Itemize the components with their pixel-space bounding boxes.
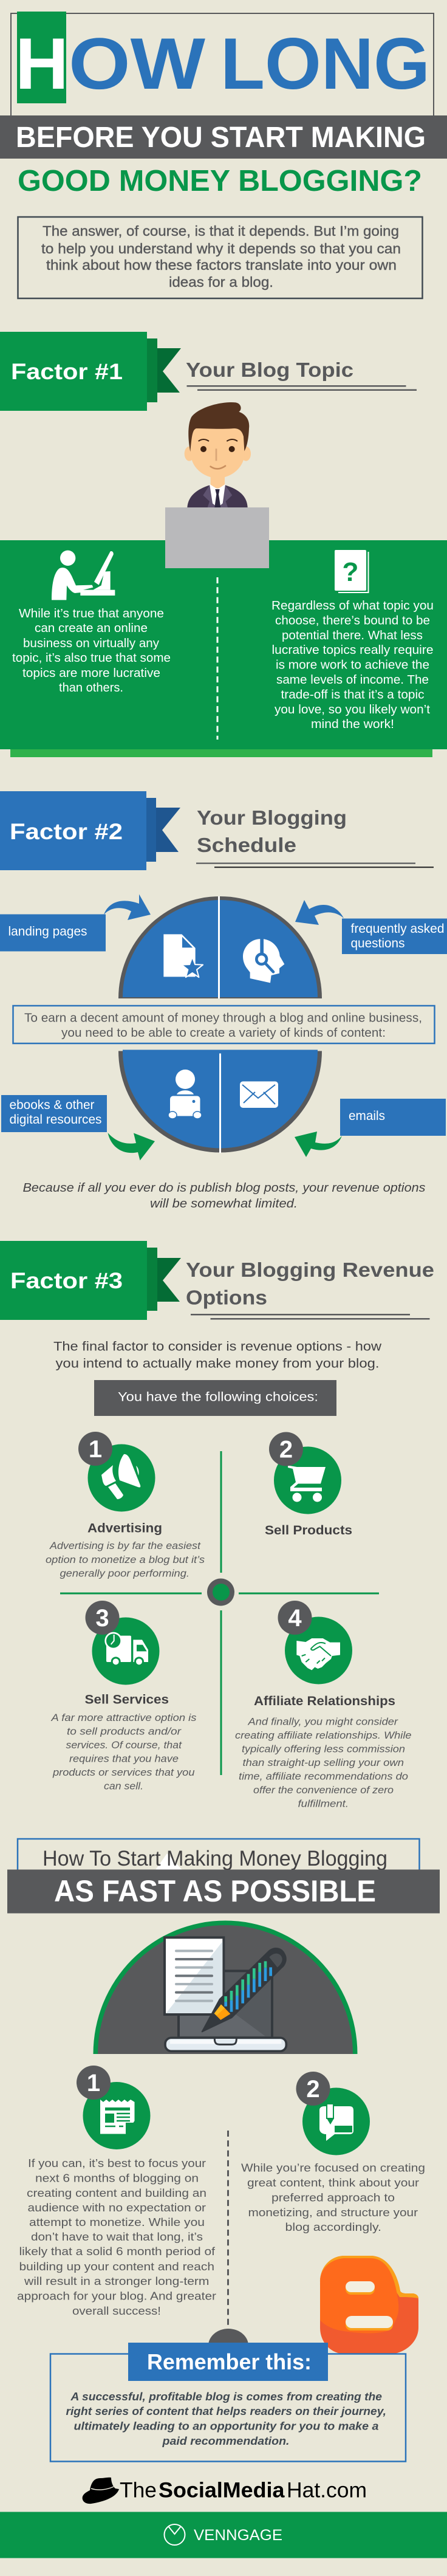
option 4: affiliate relationships: time, affiliate recommendations do xyxy=(239,1771,408,1782)
label: emails xyxy=(340,1099,446,1136)
option 3: sell services: A far more attractive option is xyxy=(50,1712,197,1723)
arrow: landing pages xyxy=(104,895,151,920)
option 1: advertising: option to monetize a blog but it’s xyxy=(46,1554,205,1565)
text: step 2: preferred approach to xyxy=(271,2191,395,2203)
title: how long: OW xyxy=(69,23,206,105)
title: how long: LONG xyxy=(220,23,430,105)
italic closing text: Because if all you ever do is publish blog posts, your revenue options xyxy=(23,1181,426,1195)
icon: headset head xyxy=(243,938,284,983)
text: left factor 1: can create an online xyxy=(35,622,148,635)
option 1: advertising: 1 xyxy=(89,1436,102,1463)
icon: person at computer xyxy=(52,551,115,600)
factor 3 heading xyxy=(186,1259,434,1320)
text: right factor 1: trade-off is that it’s a topic xyxy=(281,688,424,701)
label: landing pages: landing pages xyxy=(9,925,87,938)
panel: remember this: right series of content that helps readers on their journey, xyxy=(66,2405,386,2417)
text: step 2: monetizing, and structure your xyxy=(248,2206,418,2219)
option 3: sell services: products or services that you xyxy=(52,1767,195,1778)
option 3: sell services: services. Of course, that xyxy=(66,1739,182,1751)
icon: person with tablet xyxy=(168,1070,202,1119)
content box: you need to be able to create a variety of kinds of content: xyxy=(61,1026,386,1040)
icon: blogger logo xyxy=(320,2256,418,2354)
illustration: man behind laptop xyxy=(165,402,269,568)
option 3: sell services: 3 xyxy=(95,1605,109,1632)
factor 3 ribbon: Factor #3 xyxy=(10,1268,123,1293)
choices banner: You have the following choices: xyxy=(118,1390,318,1404)
text: right factor 1: mind the work! xyxy=(311,718,394,731)
title: good money blogging: GOOD MONEY BLOGGING? xyxy=(18,165,422,197)
text: step 2 xyxy=(241,2161,425,2233)
icon: question book: ? xyxy=(343,557,358,587)
option 2: sell products: 2 xyxy=(279,1437,293,1463)
title: how long: H xyxy=(15,23,69,105)
logo: the social media hat xyxy=(83,2478,367,2504)
revenue intro text xyxy=(53,1339,382,1371)
factor 1 ribbon xyxy=(0,332,181,411)
text: step 1: will result in a stronger long-term xyxy=(24,2275,209,2287)
label: frequently asked questions xyxy=(342,919,447,954)
factor 2 heading: Your Blogging xyxy=(197,806,347,829)
option 4: affiliate relationships: 4 xyxy=(288,1605,302,1632)
factor 3 heading: Options xyxy=(186,1286,267,1309)
option 4: affiliate relationships: fulfillment. xyxy=(298,1798,349,1810)
text: right factor 1: potential there. What less xyxy=(282,629,423,642)
revenue intro text: The final factor to consider is revenue options - how xyxy=(53,1339,382,1354)
option 1: advertising: Advertising is by far the easiest xyxy=(49,1540,201,1551)
label: frequently asked questions: frequently asked xyxy=(351,922,445,936)
text: step 1: building up your content and reach xyxy=(19,2260,214,2273)
text: right factor 1: is more work to achieve the xyxy=(276,659,429,672)
text: left factor 1: than others. xyxy=(59,681,123,695)
content box: To earn a decent amount of money through a blog and online business, xyxy=(24,1011,422,1025)
footer: venngage xyxy=(0,2512,447,2558)
text: right factor 1: choose, there’s bound to be xyxy=(275,614,430,627)
label: landing pages xyxy=(0,914,106,952)
logo: the social media hat: The xyxy=(120,2478,157,2502)
option 1: advertising: Advertising xyxy=(87,1522,162,1535)
choices banner xyxy=(94,1380,336,1416)
option 4: affiliate relationships: than straight-up selling your own xyxy=(243,1757,404,1768)
text: step 1: If you can, it’s best to focus your xyxy=(28,2157,206,2169)
factor 2 ribbon: Factor #2 xyxy=(10,819,123,844)
factor 3 heading: Your Blogging Revenue xyxy=(186,1259,434,1281)
option 4: affiliate relationships: And finally, you might consider xyxy=(247,1716,398,1727)
text: right factor 1: Regardless of what topic you xyxy=(271,599,434,613)
option 2: sell products xyxy=(265,1432,352,1537)
text: step 1: creating content and building an xyxy=(27,2186,206,2199)
factor 2 heading xyxy=(196,806,434,868)
heading: how to start making money blogging xyxy=(18,1839,419,1870)
text: step 1: next 6 months of blogging on xyxy=(35,2172,199,2184)
option 4: affiliate relationships: Affiliate Relationships xyxy=(254,1694,395,1708)
panel: remember this: paid recommendation. xyxy=(162,2434,289,2447)
text: step 1 xyxy=(17,2157,216,2317)
illustration: dome with laptop, document and pencil xyxy=(94,1921,357,2054)
option 4: affiliate relationships: typically offering less commission xyxy=(242,1743,405,1755)
text: right factor 1: same levels of income. The xyxy=(276,673,429,687)
text: left factor 1: topic, it’s also true that some xyxy=(12,651,171,665)
step 1 badge and icon xyxy=(77,2066,151,2149)
text: left factor 1 xyxy=(12,607,171,695)
icon: document with star xyxy=(163,934,203,977)
text: left factor 1: While it’s true that anyone xyxy=(19,607,164,620)
label: frequently asked questions: questions xyxy=(351,936,404,950)
label: emails: emails xyxy=(349,1109,385,1123)
factor 2 heading: Schedule xyxy=(197,834,296,856)
text: step 2: While you’re focused on creating xyxy=(241,2161,425,2174)
option 1: advertising xyxy=(46,1432,205,1579)
icon: question book xyxy=(335,550,368,592)
panel: remember this: ultimately leading to an opportunity for you to make a xyxy=(74,2420,379,2432)
text: step 2: blog accordingly. xyxy=(285,2221,381,2233)
option 4: affiliate relationships: offer the convenience of zero xyxy=(253,1784,394,1796)
text: step 1: audience with no expectation or xyxy=(28,2201,206,2214)
intro text box: ideas for a blog. xyxy=(169,274,273,290)
heading: how to start making money blogging: How To Start Making Money Blogging xyxy=(43,1847,387,1870)
option 3: sell services: requires that you have xyxy=(69,1753,179,1765)
text: right factor 1 xyxy=(271,599,434,731)
factor 1 heading: Your Blog Topic xyxy=(186,359,353,381)
text: step 1: don’t have to wait that long, it’s xyxy=(31,2230,203,2243)
intro text box xyxy=(18,217,423,298)
text: step 1: likely that a solid 6 month period of xyxy=(19,2245,216,2258)
option 4: affiliate relationships xyxy=(235,1601,412,1810)
text: step 1: attempt to monetize. While you xyxy=(29,2216,205,2228)
chart: top half circle xyxy=(118,896,322,998)
factor 1 ribbon: Factor #1 xyxy=(11,359,123,384)
intro text box: The answer, of course, is that it depends. But I’m going xyxy=(43,223,399,239)
quadrant divider xyxy=(60,1451,379,1775)
icon: envelope xyxy=(240,1082,278,1108)
content box xyxy=(13,1006,435,1043)
banner: as fast as possible xyxy=(7,1869,440,1913)
italic closing text: will be somewhat limited. xyxy=(150,1197,298,1211)
intro text box: think about how these factors translate into your own xyxy=(46,257,397,273)
step 2 badge and icon: 2 xyxy=(306,2076,320,2103)
factor 2 ribbon xyxy=(0,791,180,870)
chart: bottom half circle xyxy=(118,1050,322,1153)
title: how long xyxy=(11,12,434,115)
factor 3 ribbon xyxy=(0,1241,181,1320)
option 2: sell products: Sell Products xyxy=(265,1523,352,1537)
intro text box: to help you understand why it depends so that you can xyxy=(41,241,401,256)
step 1 badge and icon: 1 xyxy=(87,2070,100,2097)
option 4: affiliate relationships: creating affiliate relationships. While xyxy=(235,1729,412,1741)
text: step 1: overall success! xyxy=(72,2304,161,2317)
panel: factor 1 green xyxy=(0,540,447,757)
text: left factor 1: business on virtually any xyxy=(23,637,159,650)
text: step 2: great content, think about your xyxy=(247,2176,419,2189)
arrow: emails xyxy=(295,1132,342,1157)
panel: remember this: A successful, profitable blog is comes from creating the xyxy=(70,2390,382,2403)
panel: remember this: Remember this: xyxy=(147,2349,312,2374)
step 2 badge and icon xyxy=(296,2072,370,2155)
revenue intro text: you intend to actually make money from your blog. xyxy=(56,1356,379,1371)
option 3: sell services: Sell Services xyxy=(85,1693,169,1706)
title bar: before you start making: BEFORE YOU START MAKING xyxy=(16,122,426,154)
text: right factor 1: you love, so you likely won’t xyxy=(275,703,430,716)
text: right factor 1: lucrative topics really require xyxy=(272,644,434,657)
option 3: sell services: to sell products and/or xyxy=(67,1726,182,1737)
text: step 1: approach for your blog. And greater xyxy=(17,2290,216,2302)
label: ebooks and other digital resources: ebooks & other xyxy=(10,1098,95,1112)
banner: as fast as possible: AS FAST AS POSSIBLE xyxy=(54,1874,376,1908)
label: ebooks and other digital resources: digital resources xyxy=(10,1113,102,1127)
italic closing text xyxy=(23,1181,426,1211)
label: ebooks and other digital resources xyxy=(1,1095,107,1132)
logo: the social media hat: SocialMedia xyxy=(159,2478,285,2502)
option 3: sell services: can sell. xyxy=(104,1781,143,1791)
arrow: frequently asked questions xyxy=(295,900,344,925)
panel: remember this xyxy=(50,2329,406,2461)
footer: venngage: VENNGAGE xyxy=(194,2527,282,2544)
option 1: advertising: generally poor performing. xyxy=(60,1568,189,1579)
text: left factor 1: topics are more lucrative xyxy=(22,667,160,680)
option 3: sell services xyxy=(50,1601,197,1791)
logo: the social media hat: Hat.com xyxy=(287,2478,367,2502)
dashed divider xyxy=(227,2131,229,2352)
arrow: ebooks xyxy=(108,1133,155,1161)
